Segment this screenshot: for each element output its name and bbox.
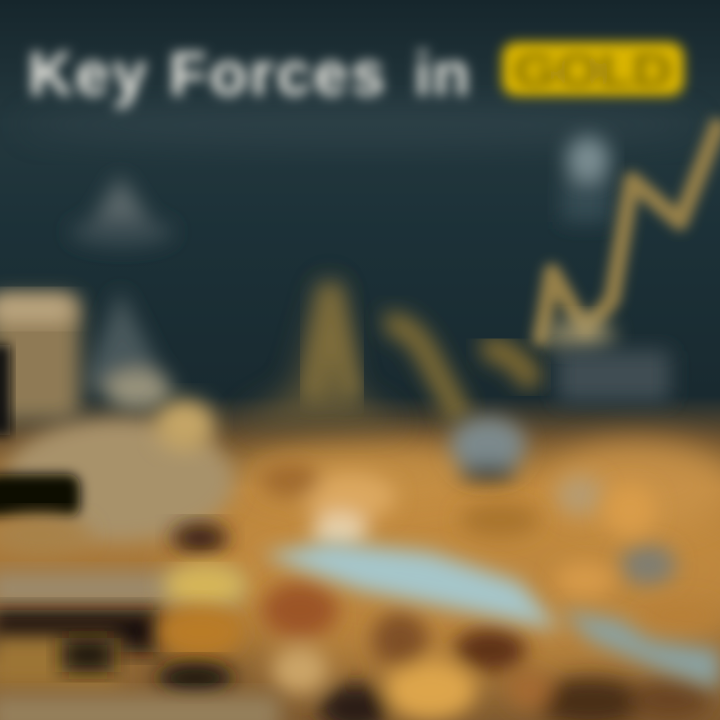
panel: dark caption block bbox=[558, 350, 670, 402]
icon: lower triangle marker bbox=[80, 290, 172, 410]
icon: left tan sack stack bbox=[0, 295, 235, 555]
line chart: gold price peaks bbox=[235, 120, 720, 425]
icon: steel sphere bbox=[450, 417, 526, 482]
icon: left shelf and gold bars bbox=[0, 563, 280, 720]
title highlight: gold: GOLD bbox=[514, 45, 672, 98]
icon: light blue wedge bbox=[262, 542, 720, 690]
icon: chart label blob bbox=[562, 136, 610, 222]
icon: upper triangle marker bbox=[70, 175, 174, 246]
title: Key Forces bbox=[28, 40, 385, 109]
icon: small gray spheres bbox=[556, 475, 676, 585]
gold nuggets foreground bbox=[260, 462, 720, 720]
title: in bbox=[414, 40, 470, 109]
